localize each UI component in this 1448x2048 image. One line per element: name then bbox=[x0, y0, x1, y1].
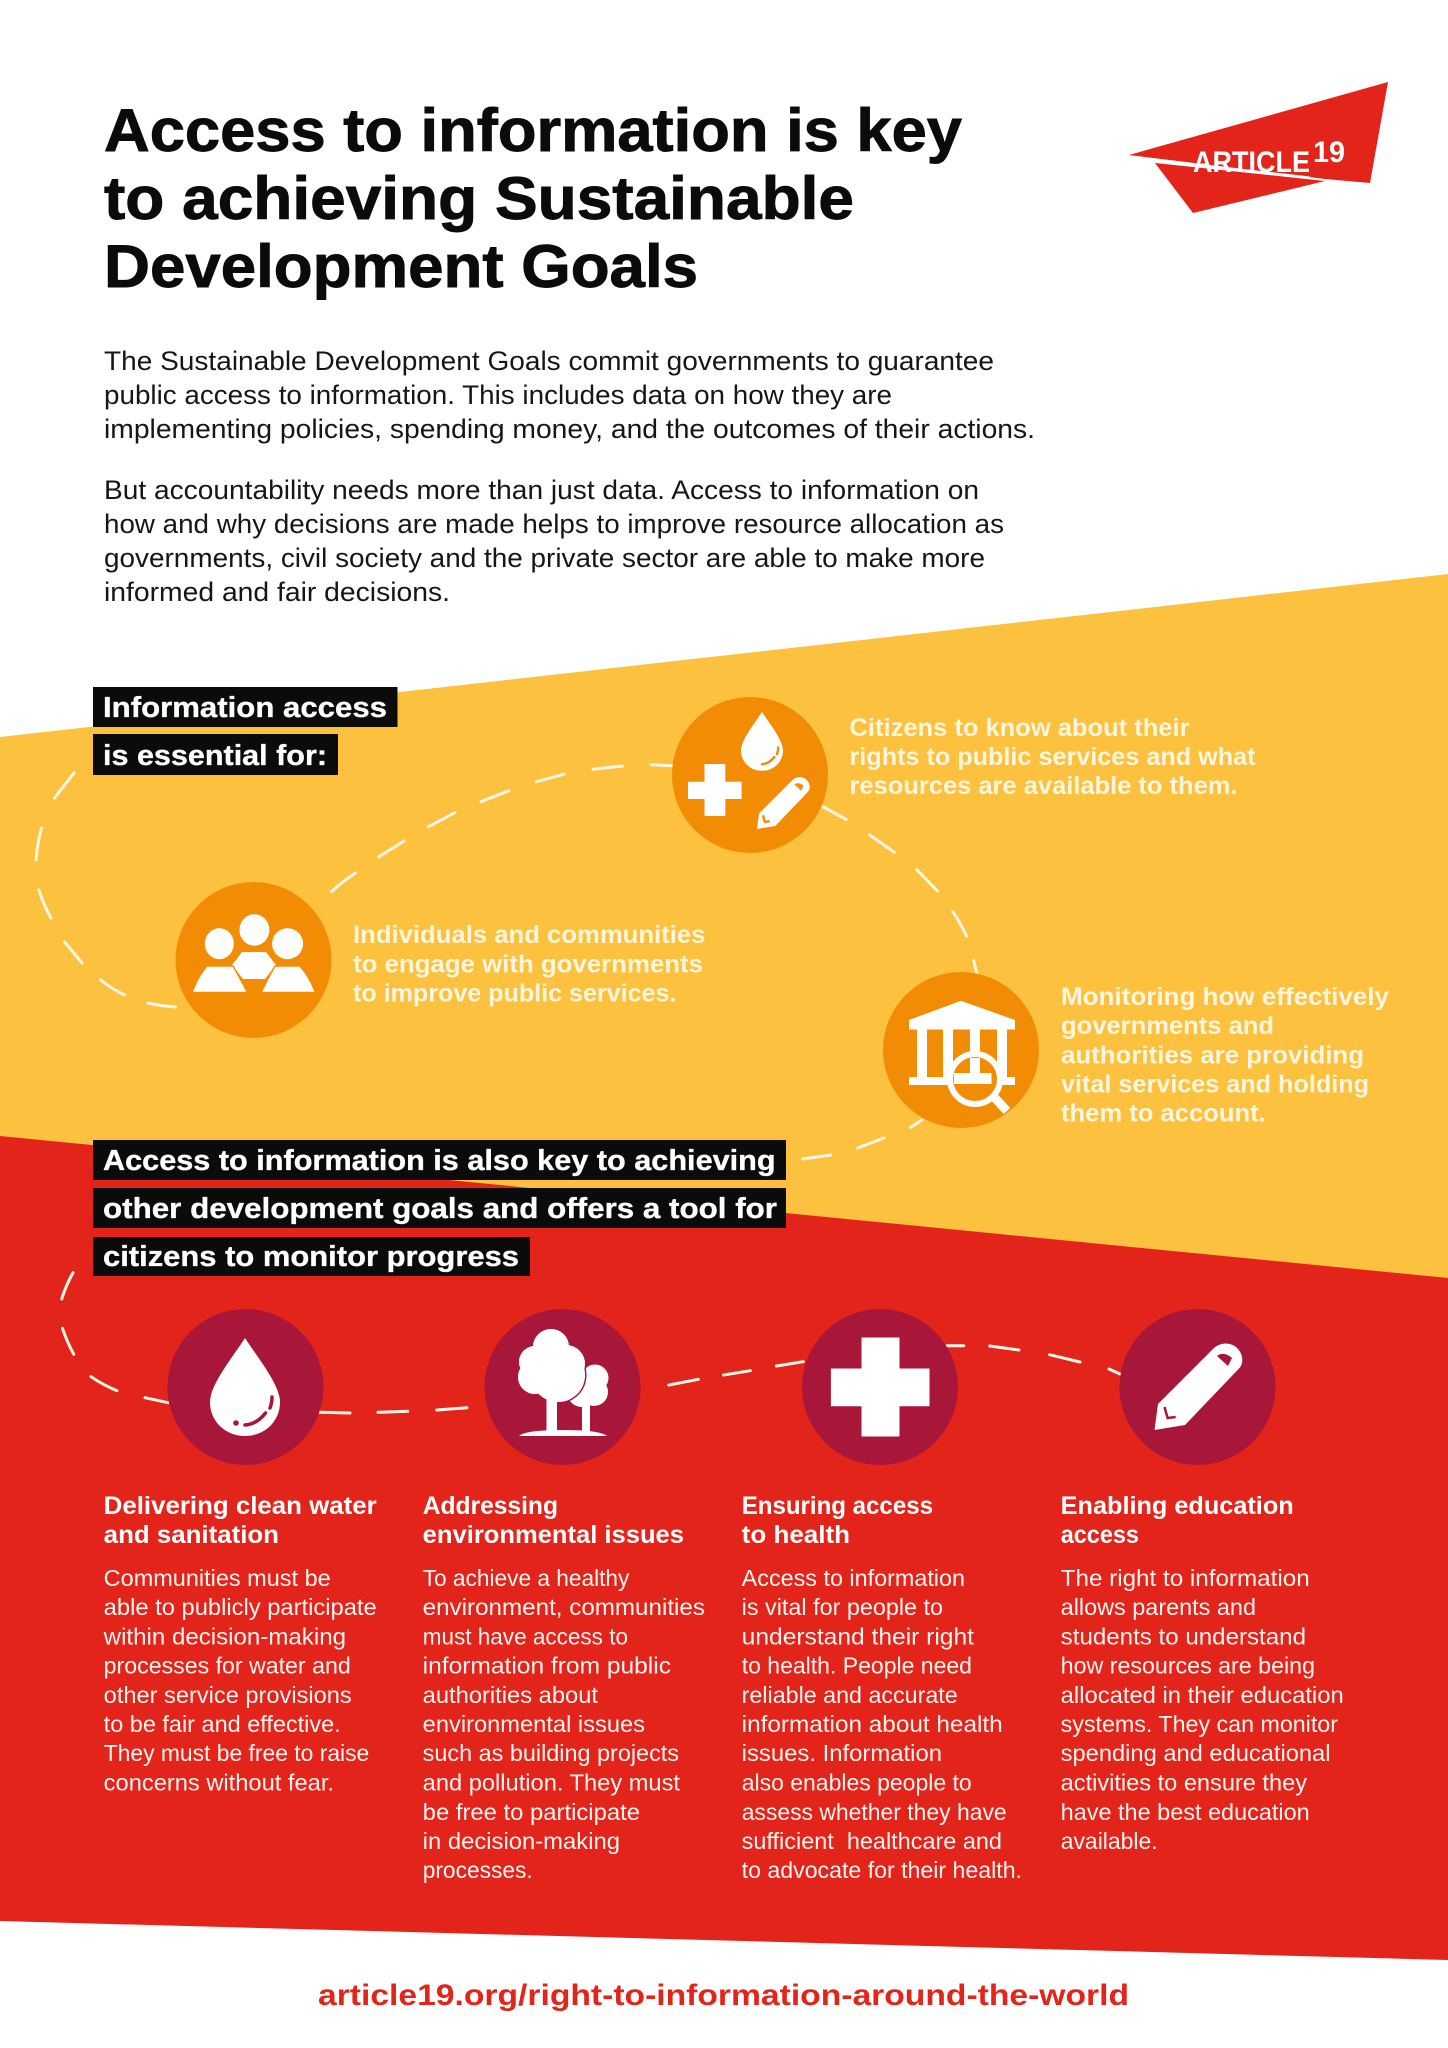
column heading: environment: environmental issues bbox=[423, 1521, 684, 1549]
heading tag: development goals: citizens to monitor progress bbox=[103, 1241, 519, 1273]
column heading: water: Delivering clean water bbox=[104, 1492, 377, 1520]
text: citizens: resources are available to them. bbox=[850, 772, 1238, 800]
column text: health bbox=[742, 1565, 1022, 1883]
column text: water: other service provisions bbox=[104, 1682, 352, 1708]
column text: education: spending and educational bbox=[1061, 1740, 1330, 1766]
text: monitoring bbox=[1061, 983, 1389, 1128]
column text: education: how resources are being bbox=[1061, 1652, 1315, 1678]
column text: education: available. bbox=[1061, 1828, 1158, 1854]
column: environmental issues bbox=[423, 1492, 705, 1883]
icon: water drop bbox=[168, 1309, 324, 1465]
column text: water: concerns without fear. bbox=[104, 1770, 334, 1796]
column text: environment: To achieve a healthy bbox=[423, 1565, 630, 1591]
column: education bbox=[1061, 1492, 1344, 1854]
intro paragraph 1 bbox=[104, 346, 1035, 444]
heading tag: information access bbox=[93, 687, 398, 775]
icon: trees bbox=[484, 1309, 640, 1465]
icon: government building with magnifier bbox=[883, 972, 1039, 1128]
logo: ARTICLE 19: ARTICLE bbox=[1193, 146, 1310, 179]
column text: education: students to understand bbox=[1061, 1624, 1306, 1650]
text: individuals and communities: to improve public services. bbox=[353, 980, 676, 1008]
dashed path: red section bbox=[62, 1273, 1120, 1413]
icon: pencil bbox=[1120, 1309, 1276, 1465]
text: monitoring: vital services and holding bbox=[1061, 1070, 1369, 1098]
column heading: education bbox=[1061, 1492, 1294, 1549]
column text: water: Communities must be bbox=[104, 1565, 331, 1591]
column text: health: to health. People need bbox=[742, 1652, 972, 1678]
column heading: environment: Addressing bbox=[423, 1492, 558, 1520]
heading tag: information access: is essential for: bbox=[103, 740, 327, 772]
column: health bbox=[742, 1492, 1022, 1883]
text: individuals and communities: to engage with governments bbox=[353, 950, 703, 978]
column text: water: processes for water and bbox=[104, 1652, 351, 1678]
column text: education: allocated in their education bbox=[1061, 1682, 1344, 1708]
column text: water bbox=[103, 1565, 377, 1796]
dashed path: yellow section bbox=[36, 765, 977, 1159]
column heading: health bbox=[742, 1492, 933, 1549]
intro paragraph 2: But accountability needs more than just data. Access to information on bbox=[104, 475, 979, 505]
text: citizens: Citizens to know about their bbox=[850, 714, 1190, 742]
heading tag: development goals: other development goals and offers a tool for bbox=[103, 1193, 777, 1225]
column text: education bbox=[1061, 1565, 1344, 1854]
icon: health cross bbox=[802, 1309, 958, 1465]
column text: health: to advocate for their health. bbox=[742, 1857, 1022, 1883]
column text: environment bbox=[423, 1565, 705, 1883]
column text: health: assess whether they have bbox=[742, 1799, 1007, 1825]
icon: citizens (drop, plus, pencil) bbox=[672, 697, 828, 853]
intro paragraph 2: informed and fair decisions. bbox=[104, 577, 450, 607]
text: citizens: rights to public services and what bbox=[850, 743, 1256, 771]
heading tag: development goals: Access to information is also key to achieving bbox=[103, 1145, 776, 1177]
text: monitoring: them to account. bbox=[1061, 1100, 1266, 1128]
icon: people group bbox=[176, 882, 332, 1038]
column text: water: They must be free to raise bbox=[104, 1740, 369, 1766]
column text: environment: authorities about bbox=[423, 1682, 599, 1708]
text: citizens bbox=[850, 714, 1256, 800]
column text: environment: processes. bbox=[423, 1857, 533, 1883]
column text: environment: such as building projects bbox=[423, 1740, 679, 1766]
title: to achieving Sustainable bbox=[104, 165, 854, 232]
column heading: environment bbox=[423, 1492, 684, 1549]
column text: environment: must have access to bbox=[423, 1624, 628, 1650]
footer URL: article19.org/right-to-information-around-the-world bbox=[318, 1979, 1129, 2012]
column text: education: systems. They can monitor bbox=[1061, 1711, 1338, 1737]
intro paragraph 1: The Sustainable Development Goals commit governments to guarantee bbox=[104, 346, 994, 376]
column text: health: information about health bbox=[742, 1711, 1003, 1737]
column heading: education: Enabling education bbox=[1061, 1492, 1294, 1520]
text: monitoring: governments and bbox=[1061, 1012, 1274, 1040]
column text: health: Access to information bbox=[742, 1565, 965, 1591]
column text: health: reliable and accurate bbox=[742, 1682, 958, 1708]
title bbox=[104, 97, 963, 300]
intro paragraph 2 bbox=[104, 475, 1004, 607]
text: individuals and communities bbox=[353, 921, 705, 1008]
column heading: education: access bbox=[1061, 1521, 1139, 1549]
column text: education: allows parents and bbox=[1061, 1594, 1256, 1620]
intro paragraph 2: governments, civil society and the private sector are able to make more bbox=[104, 543, 985, 573]
column text: environment: information from public bbox=[423, 1652, 671, 1678]
column text: education: activities to ensure they bbox=[1061, 1770, 1308, 1796]
column heading: health: to health bbox=[742, 1521, 850, 1549]
intro paragraph 1: public access to information. This includes data on how they are bbox=[104, 380, 892, 410]
logo: ARTICLE 19 bbox=[1129, 82, 1388, 213]
column text: health: understand their right bbox=[742, 1624, 975, 1650]
column text: environment: environmental issues bbox=[423, 1711, 645, 1737]
column text: education: have the best education bbox=[1061, 1799, 1310, 1825]
column text: water: able to publicly participate bbox=[104, 1594, 377, 1620]
column text: water: within decision-making bbox=[103, 1624, 346, 1650]
column text: health: is vital for people to bbox=[742, 1594, 943, 1620]
column text: environment: in decision-making bbox=[423, 1828, 620, 1854]
column text: environment: and pollution. They must bbox=[423, 1770, 681, 1796]
text: individuals and communities: Individuals and communities bbox=[353, 921, 705, 949]
text: monitoring: Monitoring how effectively bbox=[1061, 983, 1389, 1011]
title: Access to information is key bbox=[104, 97, 963, 164]
column text: environment: environment, communities bbox=[423, 1594, 705, 1620]
column heading: health: Ensuring access bbox=[742, 1492, 933, 1520]
column heading: water bbox=[104, 1492, 377, 1549]
panel: red background band bbox=[0, 1136, 1448, 1960]
column text: water: to be fair and effective. bbox=[104, 1711, 341, 1737]
intro paragraph 2: how and why decisions are made helps to improve resource allocation as bbox=[104, 509, 1004, 539]
column text: environment: be free to participate bbox=[423, 1799, 640, 1825]
title: Development Goals bbox=[104, 233, 698, 300]
logo: ARTICLE 19: 19 bbox=[1313, 136, 1345, 169]
text: monitoring: authorities are providing bbox=[1061, 1041, 1364, 1069]
heading tag: development goals bbox=[93, 1140, 786, 1276]
column text: health: also enables people to bbox=[742, 1770, 972, 1796]
panel: yellow background band bbox=[0, 574, 1448, 1290]
intro paragraph 1: implementing policies, spending money, and the outcomes of their actions. bbox=[104, 414, 1035, 444]
column heading: water: and sanitation bbox=[104, 1521, 279, 1549]
column text: education: The right to information bbox=[1061, 1565, 1310, 1591]
column: water and sanitation bbox=[103, 1492, 377, 1796]
heading tag: information access: Information access bbox=[103, 692, 387, 724]
column text: health: sufficient healthcare and bbox=[742, 1828, 1002, 1854]
column text: health: issues. Information bbox=[742, 1740, 942, 1766]
